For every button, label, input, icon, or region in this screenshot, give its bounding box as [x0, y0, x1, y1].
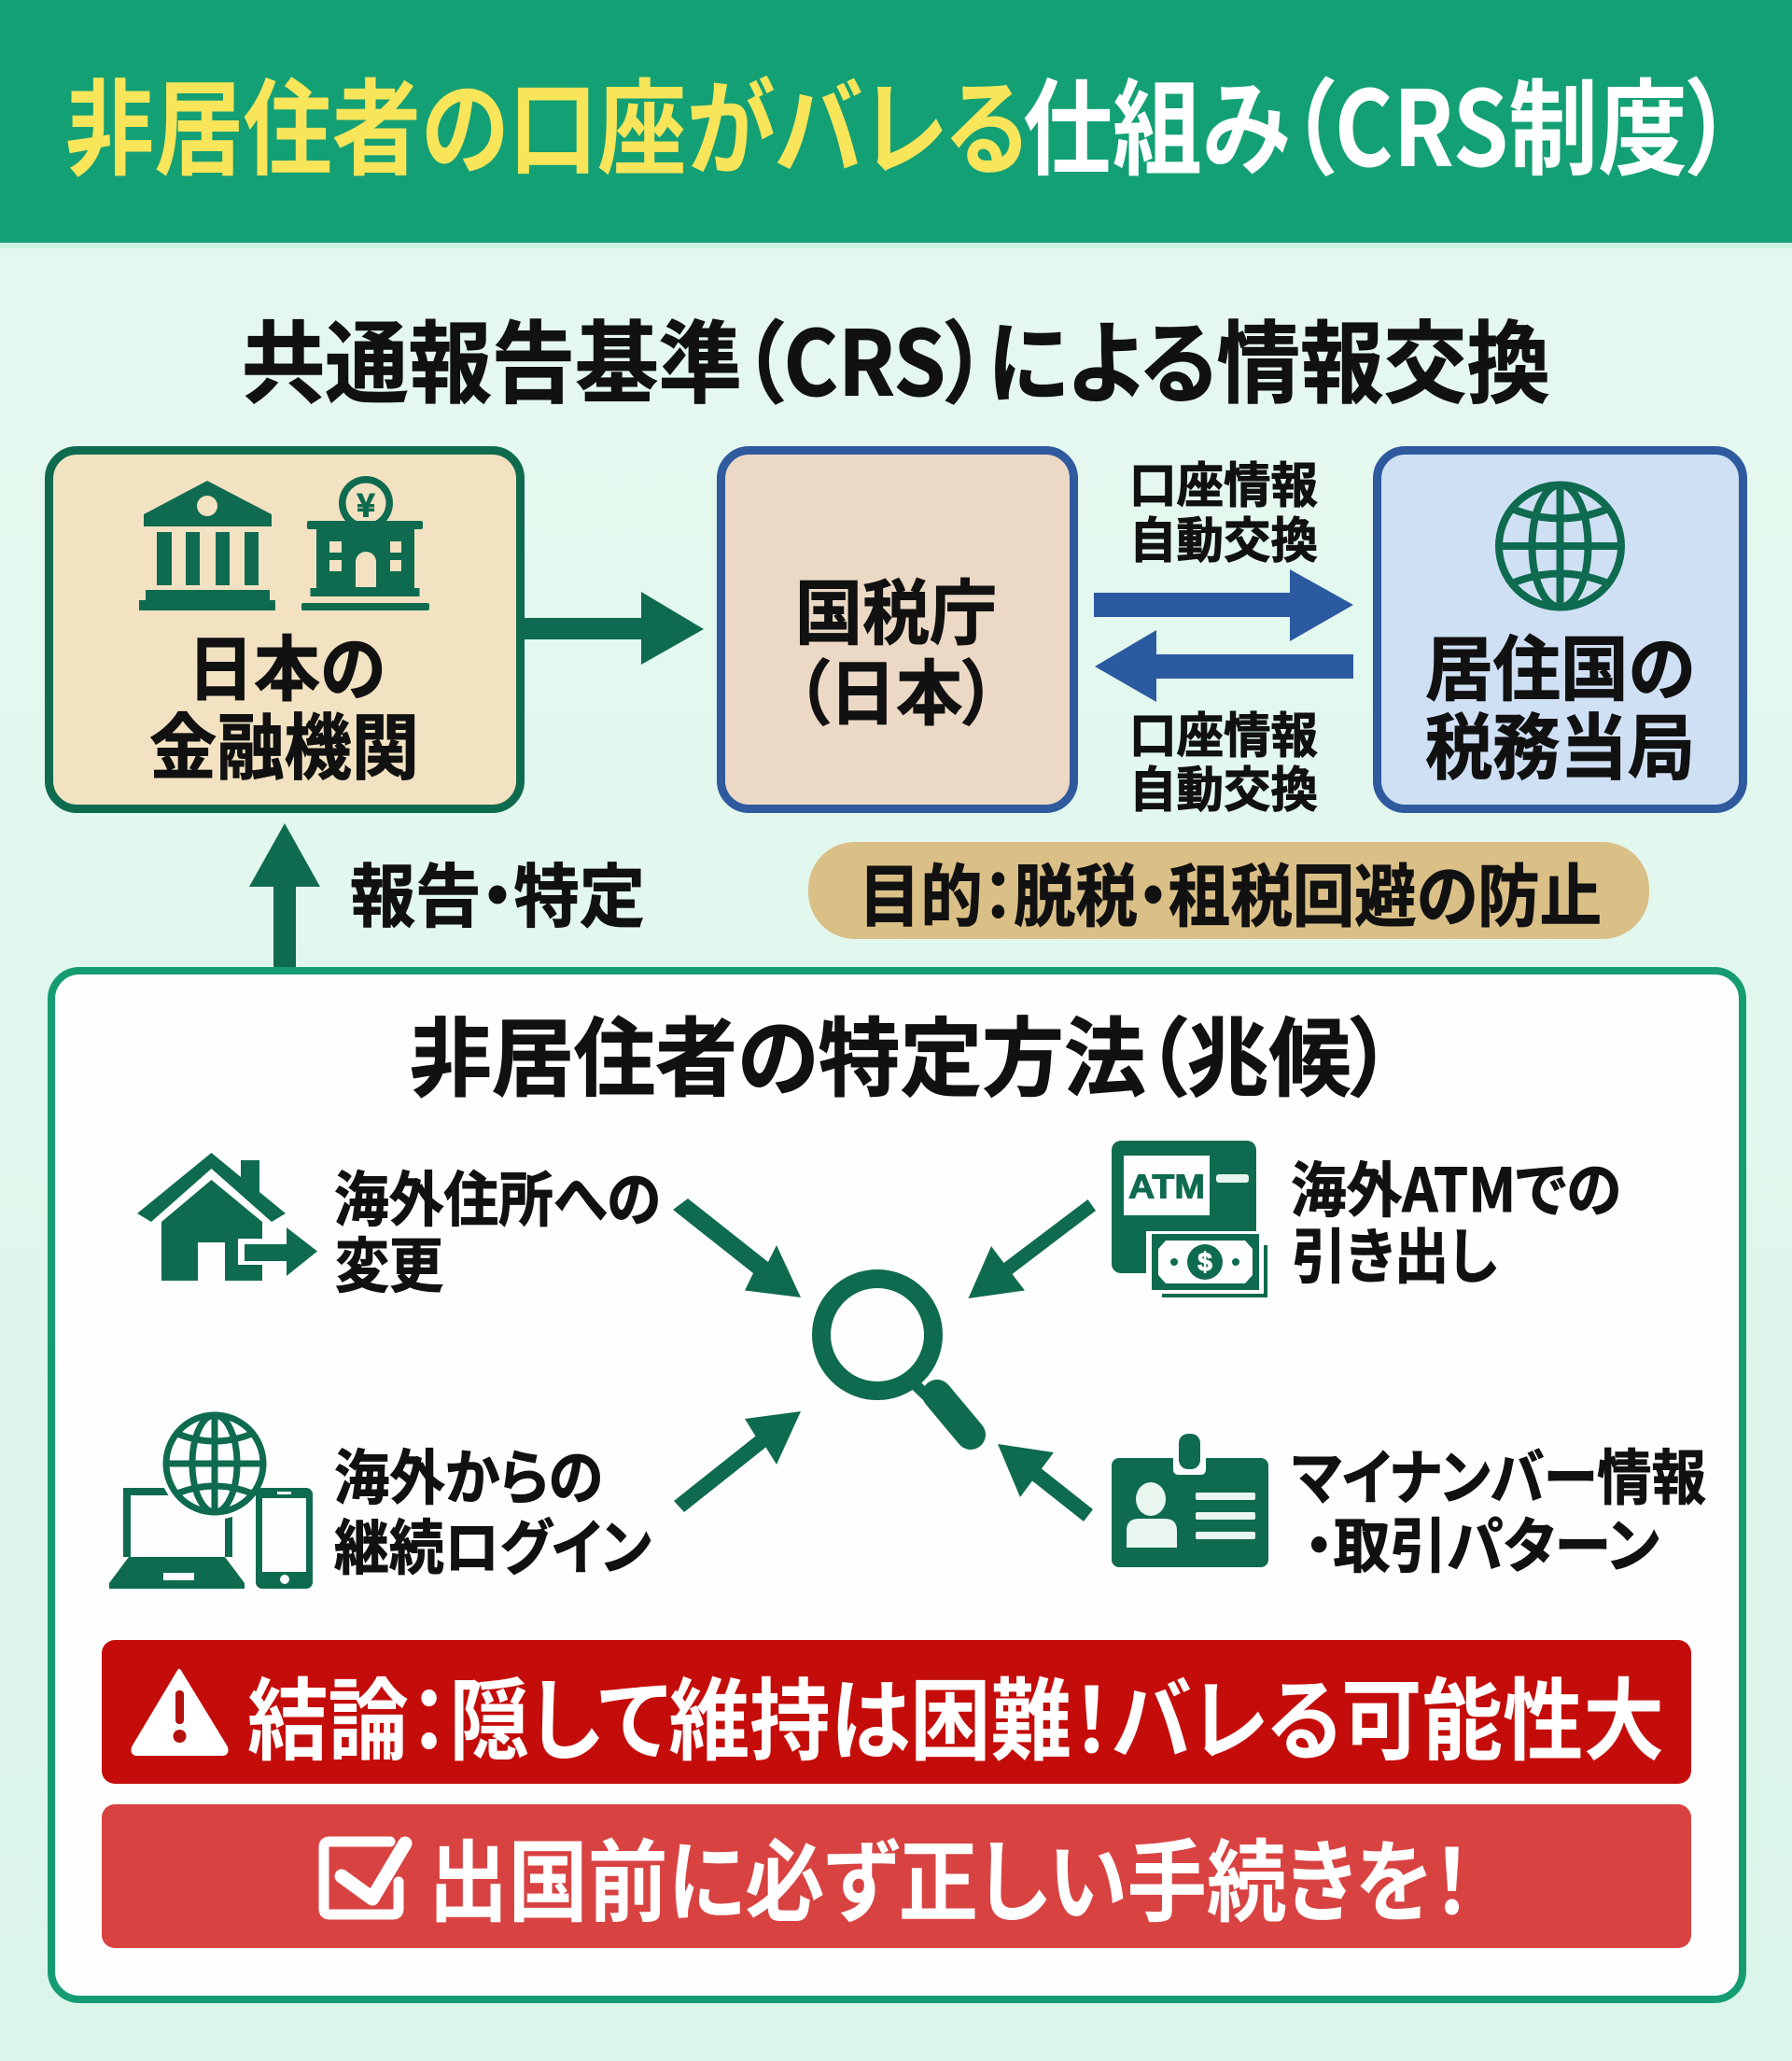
arrow: residence authority to tax agency: [1095, 630, 1353, 702]
heading: CRS information exchange: 共通報告基準（CRS）による情報交換: [242, 291, 1550, 422]
arrow: reporting up to institutions: [249, 823, 320, 971]
banner: conclusion: 結論：隠して維持は困難！バレる可能性大: [247, 1648, 1664, 1779]
icon: ATM and cash: [1112, 1141, 1267, 1300]
text: My Number info and transaction patterns: [1292, 1431, 1706, 1585]
text: change to overseas address: 変更: [335, 1219, 443, 1305]
text: withdrawal at overseas ATM: [1291, 1143, 1621, 1296]
label: National Tax Agency: 国税庁: [795, 556, 997, 659]
label: automatic exchange, top: [1129, 446, 1318, 571]
text: continuous login from overseas: 海外からの: [334, 1431, 603, 1517]
text: My Number info and transaction patterns: マイナンバー情報: [1292, 1431, 1706, 1517]
label: automatic exchange, bottom: 口座情報: [1129, 696, 1318, 767]
icon: house with arrow: [137, 1153, 317, 1281]
panel: tax authority of country of residence: [1378, 450, 1743, 808]
icon: warning triangle: [133, 1671, 226, 1754]
label: tax authority of country of residence: 居住国の: [1425, 612, 1695, 715]
text: continuous login from overseas: [334, 1431, 651, 1587]
title: 非居住者の口座がバレる: [65, 46, 1028, 197]
arrow: institutions to tax agency: [525, 592, 704, 665]
label: automatic exchange, bottom: 自動交換: [1129, 750, 1318, 821]
icon: ATM and cash: $: [1197, 1247, 1212, 1277]
text: change to overseas address: [334, 1153, 661, 1305]
icon: laptop, phone and globe: [109, 1408, 313, 1589]
panel: Japanese financial institutions: [49, 450, 521, 808]
label: automatic exchange, bottom: [1129, 696, 1318, 821]
icon: magnifying glass: [821, 1279, 971, 1435]
text: continuous login from overseas: 継続ログイン: [334, 1501, 651, 1587]
label: National Tax Agency: （日本）: [796, 637, 996, 739]
text: withdrawal at overseas ATM: 海外ATMでの: [1291, 1143, 1621, 1229]
icon: yen bank: [301, 476, 429, 610]
icon: classical bank: [139, 481, 275, 610]
arrow: address to magnifier: [673, 1199, 801, 1297]
arrow: ID to magnifier: [998, 1444, 1093, 1521]
label: tax authority of country of residence: 税務当局: [1425, 691, 1695, 795]
panel: identification methods: [51, 971, 1743, 1999]
label: tax authority of country of residence: [1425, 612, 1695, 795]
label: automatic exchange, top: 口座情報: [1129, 446, 1318, 517]
icon: globe: [1499, 485, 1621, 607]
heading: identification methods: 非居住者の特定方法（兆候）: [410, 989, 1392, 1115]
title: [65, 46, 1732, 197]
label: Japanese financial institutions: [149, 612, 419, 795]
text: change to overseas address: 海外住所への: [334, 1153, 661, 1239]
icon: checkbox: [324, 1842, 405, 1914]
label: report and identify: 報告・特定: [350, 842, 645, 941]
arrow: login to magnifier: [674, 1411, 801, 1512]
icon: ID card: [1112, 1434, 1268, 1567]
icon: ATM and cash: ATM: [1128, 1167, 1205, 1206]
header band: [0, 0, 1792, 248]
text: My Number info and transaction patterns: ・取引パターン: [1305, 1499, 1659, 1585]
text: withdrawal at overseas ATM: 引き出し: [1292, 1210, 1497, 1296]
label: automatic exchange, top: 自動交換: [1129, 502, 1318, 571]
label: National Tax Agency: [795, 556, 997, 739]
arrow: ATM to magnifier: [969, 1199, 1096, 1298]
label: Japanese financial institutions: 金融機関: [149, 691, 419, 795]
pill: purpose: 目的：脱税・租税回避の防止: [859, 842, 1602, 941]
arrow: tax agency to residence authority: [1094, 569, 1353, 641]
banner: action: 出国前に必ず正しい手続きを！: [428, 1811, 1472, 1940]
panel: National Tax Agency: [721, 450, 1073, 808]
label: Japanese financial institutions: 日本の: [188, 612, 385, 715]
banner: action: [102, 1804, 1691, 1948]
icon: yen bank: ¥: [357, 480, 375, 526]
